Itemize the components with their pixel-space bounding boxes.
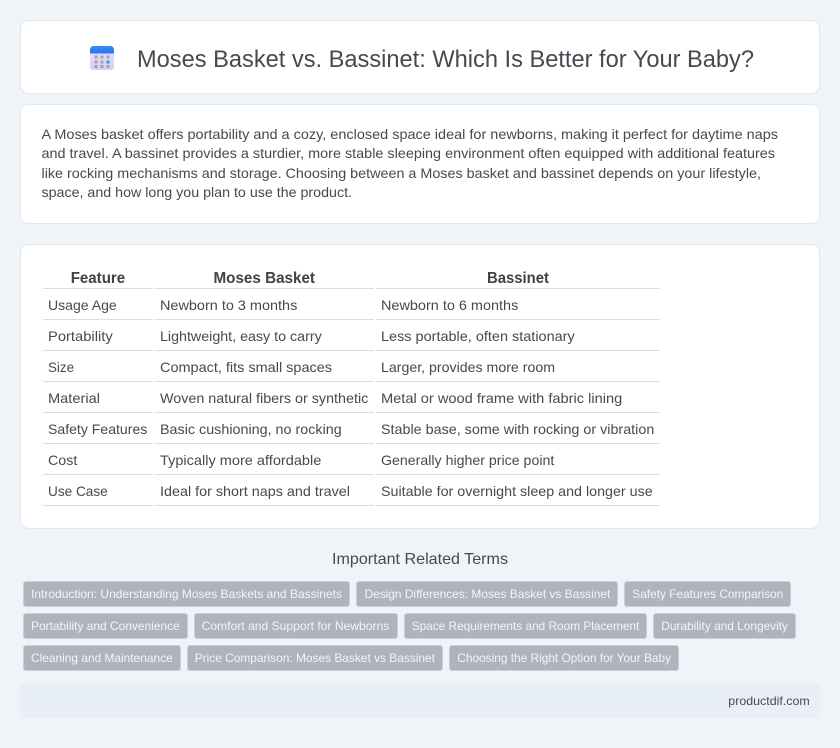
text block: introduction paragraph: like rocking mechanisms and storage. Choosing between a Moses basket and bassinet depends on your lifestyle, [42, 165, 761, 181]
tag [404, 614, 646, 638]
table row: use case: Ideal for short naps and travel [160, 483, 350, 499]
tag [24, 614, 188, 638]
tag: Price Comparison: Moses Basket vs Bassinet [195, 651, 436, 665]
table row: size [43, 359, 660, 382]
table row: material: Material [48, 390, 100, 406]
tag: Introduction: Understanding Moses Baskets and Bassinets [31, 587, 342, 601]
table row: material [43, 390, 660, 413]
tag [194, 614, 398, 638]
tag: Comfort and Support for Newborns [202, 619, 389, 633]
tag: Space Requirements and Room Placement [412, 619, 640, 633]
footer source text: productdif.com [728, 694, 810, 708]
table header row: Feature [71, 270, 125, 287]
tag: Design Differences: Moses Basket vs Bassinet [364, 587, 611, 601]
text block: introduction paragraph [42, 126, 778, 200]
table row: cost: Generally higher price point [381, 452, 554, 468]
icon: calendar [90, 46, 114, 70]
text block: introduction paragraph: and travel. A bassinet provides a sturdier, more stable sleeping environment often equipped with additional features [42, 145, 775, 161]
footer bar [20, 684, 820, 718]
heading: related terms: Important Related Terms [332, 551, 508, 568]
table row: usage age: Newborn to 6 months [381, 297, 518, 313]
table row: use case [43, 483, 660, 506]
tag: Durability and Longevity [661, 619, 788, 633]
tag: Portability and Convenience [31, 619, 180, 633]
tag [24, 582, 350, 606]
table row: safety features: Basic cushioning, no rocking [160, 421, 342, 437]
tag: Safety Features Comparison [632, 587, 783, 601]
tag list: related terms [24, 582, 796, 670]
table row: safety features: Stable base, some with rocking or vibration [381, 421, 654, 437]
table row: usage age: Newborn to 3 months [160, 297, 297, 313]
panel: title header [20, 20, 820, 94]
tag [188, 646, 442, 670]
table header row: Moses Basket [214, 270, 316, 287]
table row: use case: Use Case [48, 483, 108, 499]
table row: portability: Portability [48, 328, 113, 344]
tag [24, 646, 180, 670]
table row: portability: Less portable, often stationary [381, 328, 575, 344]
table row: material: Woven natural fibers or synthetic [160, 390, 368, 406]
table row: usage age: Usage Age [48, 297, 117, 313]
table row: usage age [43, 297, 660, 320]
table header row: Bassinet [487, 270, 550, 287]
tag [654, 614, 796, 638]
panel: comparison table [20, 244, 820, 528]
table header row [43, 270, 660, 289]
table row: cost [43, 452, 660, 475]
table row: use case: Suitable for overnight sleep and longer use [381, 483, 653, 499]
table row: cost: Cost [48, 452, 77, 468]
text block: introduction paragraph: space, and how long you plan to use the product. [42, 184, 352, 200]
table row: size: Larger, provides more room [381, 359, 555, 375]
tag [624, 582, 790, 606]
tag [450, 646, 678, 670]
table row: safety features: Safety Features [48, 421, 147, 437]
table row: cost: Typically more affordable [160, 452, 322, 468]
table row: size: Size [48, 359, 74, 375]
tag: Cleaning and Maintenance [31, 651, 173, 665]
title: Moses Basket vs. Bassinet: Which Is Better for Your Baby? [137, 46, 754, 73]
table row: portability [43, 328, 660, 351]
tag [356, 582, 618, 606]
table row: safety features [43, 421, 660, 444]
table row: material: Metal or wood frame with fabric lining [381, 390, 622, 406]
table row: size: Compact, fits small spaces [160, 359, 332, 375]
table row: portability: Lightweight, easy to carry [160, 328, 322, 344]
panel: introduction [20, 104, 820, 224]
text block: introduction paragraph: A Moses basket offers portability and a cozy, enclosed space ideal for newborns, making it perfect for daytime naps [42, 126, 778, 142]
tag: Choosing the Right Option for Your Baby [457, 651, 671, 665]
